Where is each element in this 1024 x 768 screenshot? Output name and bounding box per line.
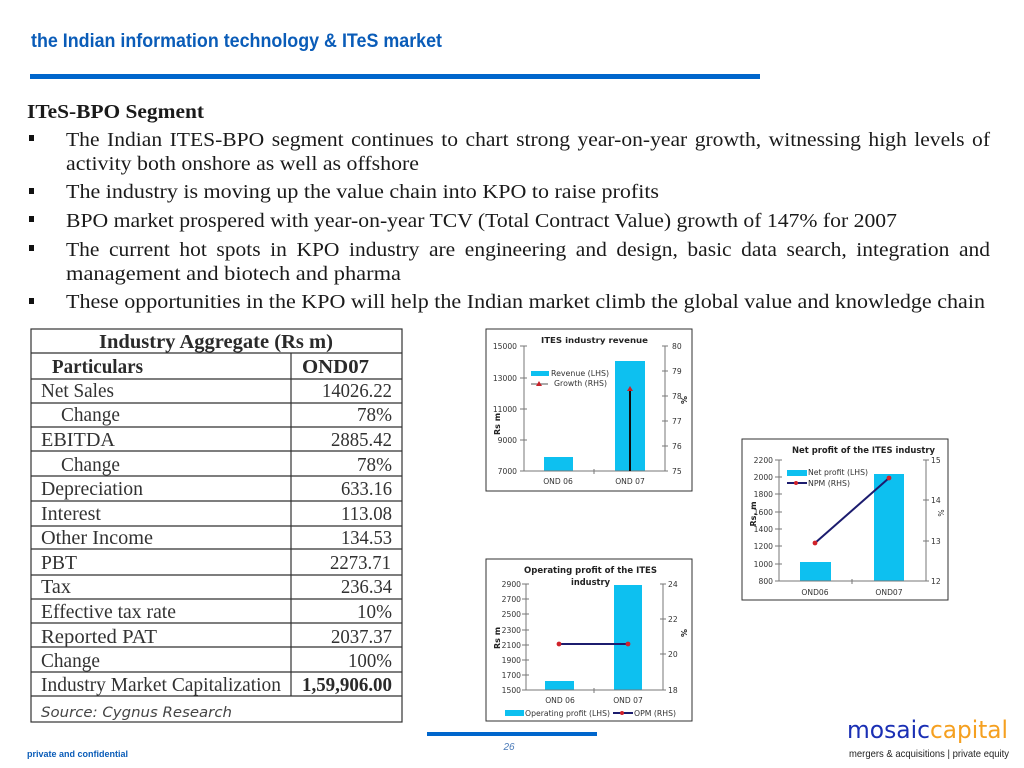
chart: ITES industry revenue: 79 [672,367,682,376]
table: industry aggregate: Tax [41,577,71,598]
chart: net profit of the ITES industry: 15 [931,456,941,465]
bullet text block [27,101,990,313]
table: industry aggregate: Depreciation [41,479,143,500]
chart: operating profit of the ITES industry: 24 [668,580,678,589]
chart: operating profit of the ITES industry: 20 [668,650,678,659]
chart: net profit of the ITES industry: 2200 [754,456,773,465]
table: industry aggregate: Net Sales [41,381,114,402]
chart: ITES industry revenue: OND 07 [615,477,645,486]
chart: ITES industry revenue: 13000 [493,374,517,383]
chart: ITES industry revenue: 11000 [493,405,517,414]
table: industry aggregate: Change [61,455,120,476]
logo: mosaic [847,716,930,744]
chart: net profit of the ITES industry: 14 [931,496,941,505]
chart: net profit of the ITES industry: 1600 [754,508,773,517]
chart: net profit of the ITES industry: Rs, m [749,501,758,527]
table: industry aggregate: 14026.22 [322,381,392,402]
table: industry aggregate: 78% [357,405,392,426]
chart: operating profit of the ITES industry: 2300 [502,626,521,635]
chart: ITES industry revenue: 78 [672,392,682,401]
chart: ITES industry revenue: ITES industry revenue [541,336,649,345]
table: industry aggregate: Particulars [52,357,143,378]
chart: ITES industry revenue: 76 [672,442,682,451]
chart: ITES industry revenue: 7000 [498,467,517,476]
table: industry aggregate: 113.08 [341,504,392,525]
table: industry aggregate: 2037.37 [331,627,392,648]
table: industry aggregate [31,329,402,722]
bullet 1: activity both onshore as well as offshore [66,153,419,175]
chart: operating profit of the ITES industry: 2500 [502,610,521,619]
chart: net profit of the ITES industry: 1200 [754,542,773,551]
confidentiality note: private and confidential [27,749,128,760]
bullet 4: The current hot spots in KPO industry are engineering and design, basic data search, integration and [66,239,990,261]
table: industry aggregate: Interest [41,504,102,525]
table: industry aggregate: 100% [348,651,392,672]
bullet 1 [29,129,990,175]
bullet 5: These opportunities in the KPO will help the Indian market climb the global value and knowledge chain [66,291,985,313]
chart: ITES industry revenue: Revenue (LHS) [551,369,609,378]
page number: 26 [502,742,515,753]
bullet 3: BPO market prospered with year-on-year TCV (Total Contract Value) growth of 147% for 2007 [66,210,897,232]
chart: operating profit of the ITES industry: industry [571,578,610,588]
bullet 2: The industry is moving up the value chain into KPO to raise profits [66,181,659,203]
table: industry aggregate: 10% [357,602,392,623]
chart: operating profit of the ITES industry: 18 [668,686,678,695]
chart: operating profit of the ITES industry: OND 06 [545,696,575,705]
chart: net profit of the ITES industry: % [937,509,946,517]
table: industry aggregate: 2885.42 [331,430,392,451]
chart: net profit of the ITES industry: 12 [931,577,941,586]
table: industry aggregate: 134.53 [341,528,392,549]
chart: ITES industry revenue [486,329,692,491]
chart: operating profit of the ITES industry: OPM (RHS) [634,709,676,718]
chart: ITES industry revenue: 9000 [498,436,517,445]
chart: operating profit of the ITES industry: 22 [668,615,678,624]
chart: operating profit of the ITES industry: Operating profit (LHS) [525,709,610,718]
table: industry aggregate: 2273.71 [330,553,391,574]
chart: net profit of the ITES industry: 13 [931,537,941,546]
title: the Indian information technology & ITeS market [31,31,443,52]
chart: net profit of the ITES industry: 1400 [754,525,773,534]
table: industry aggregate: EBITDA [41,430,115,451]
chart: operating profit of the ITES industry: 2700 [502,595,521,604]
chart: net profit of the ITES industry: Net profit (LHS) [808,468,868,477]
chart: ITES industry revenue: 15000 [493,342,517,351]
chart: ITES industry revenue: 77 [672,417,682,426]
chart: operating profit of the ITES industry: 1900 [502,656,521,665]
chart: ITES industry revenue: 80 [672,342,682,351]
table: industry aggregate: OND07 [302,357,369,378]
chart: net profit of the ITES industry: NPM (RHS) [808,479,850,488]
table: industry aggregate: 236.34 [341,577,392,598]
table: industry aggregate: 78% [357,455,392,476]
table: industry aggregate: Source: Cygnus Research [41,705,232,721]
logo: mergers & acquisitions | private equity [849,748,1010,760]
chart: operating profit of the ITES industry: Rs m [493,627,502,649]
chart: ITES industry revenue: OND 06 [543,477,573,486]
table: industry aggregate: PBT [41,553,77,574]
chart: operating profit of the ITES industry: 2900 [502,580,521,589]
chart: net profit of the ITES industry: OND07 [875,588,903,597]
chart: operating profit of the ITES industry: 1700 [502,671,521,680]
table: industry aggregate: Change [41,651,100,672]
chart: net profit of the ITES industry: 800 [758,577,773,586]
bullet 4 [29,239,990,285]
table: industry aggregate: Effective tax rate [41,602,176,623]
table: industry aggregate: Industry Market Capitalization [41,675,281,696]
chart: net profit of the ITES industry: 1800 [754,490,773,499]
table: industry aggregate: Industry Aggregate (Rs m) [99,332,333,353]
table: industry aggregate: Reported PAT [41,627,157,648]
header rule [30,74,760,79]
chart: ITES industry revenue: % [680,396,689,404]
chart: net profit of the ITES industry: Net profit of the ITES industry [792,446,935,456]
table: industry aggregate: 633.16 [341,479,392,500]
table: industry aggregate: 1,59,906.00 [302,675,392,696]
chart: ITES industry revenue: Growth (RHS) [554,379,607,388]
chart: net profit of the ITES industry [742,439,948,600]
logo: capital [930,716,1008,744]
chart: operating profit of the ITES industry: 2100 [502,641,521,650]
chart: net profit of the ITES industry: OND06 [801,588,829,597]
footer rule [427,732,597,736]
chart: operating profit of the ITES industry [486,559,692,721]
table: industry aggregate: Other Income [41,528,153,549]
bullet 1: The Indian ITES-BPO segment continues to chart strong year-on-year growth, witnessing high levels of [66,129,990,151]
chart: ITES industry revenue: 75 [672,467,682,476]
section heading: ITeS-BPO Segment [27,101,204,123]
chart: operating profit of the ITES industry: % [680,629,689,637]
chart: operating profit of the ITES industry: Operating profit of the ITES [524,566,657,576]
table: industry aggregate: Change [61,405,120,426]
chart: net profit of the ITES industry: 1000 [754,560,773,569]
chart: operating profit of the ITES industry: OND 07 [613,696,643,705]
chart: ITES industry revenue: Rs m [493,413,502,435]
bullet 4: management and biotech and pharma [66,263,401,285]
chart: operating profit of the ITES industry: 1500 [502,686,521,695]
chart: net profit of the ITES industry: 2000 [754,473,773,482]
logo [847,716,1010,760]
